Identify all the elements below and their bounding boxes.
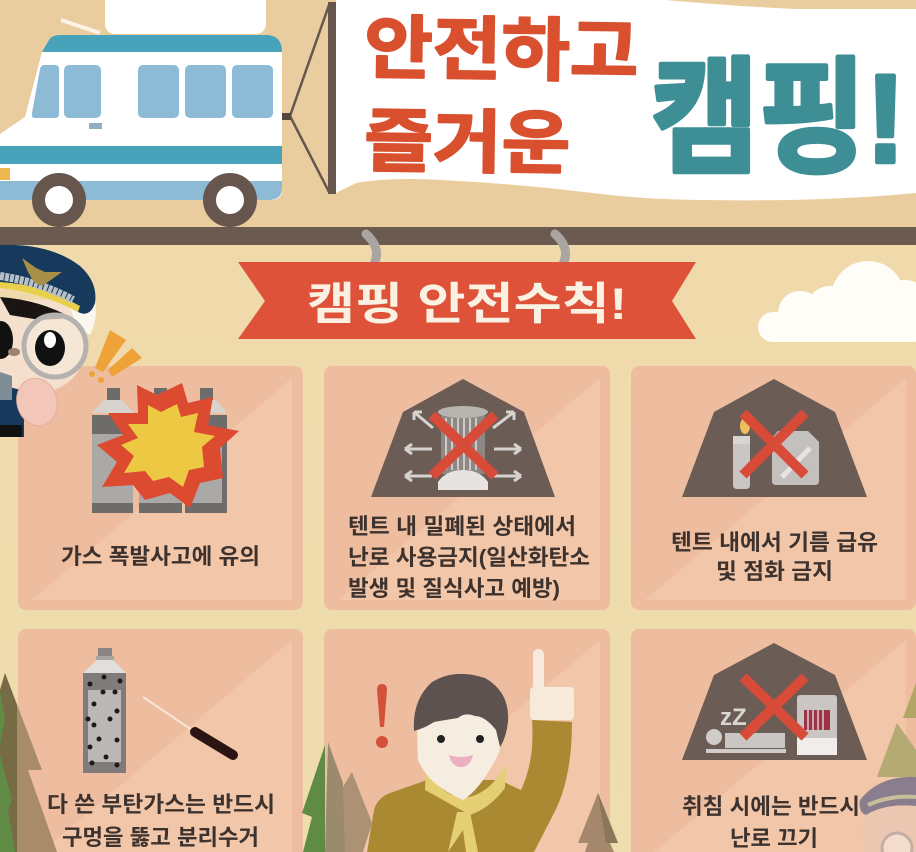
text: 난로 끄기 [730,826,818,851]
text: 구멍을 뚫고 분리수거 [62,825,259,850]
trees: left [0,673,57,852]
text: 다 쓴 부탄가스는 반드시 [47,792,275,817]
banner flag [282,0,916,200]
camping bus [0,0,282,220]
character: scout pointing up [367,649,574,852]
text [671,530,878,584]
icon: tent with sleeper and heater crossed out [682,643,867,760]
icon: punctured can and awl [83,648,233,773]
title: 안전하고 즐거운 [364,10,639,183]
text [682,794,860,851]
text: 가스 폭발사고에 유의 [61,544,260,569]
title: 캠핑!: 캠핑! [651,49,905,189]
icon: tent with lighter and fuel can crossed out [682,379,867,497]
police mascot [0,245,142,437]
panel: puncture butane can [18,629,303,852]
panel: no oil refuel in tent [631,366,916,610]
icon: tent with heater crossed out [371,379,555,497]
text [47,792,275,850]
text: 발생 및 질식사고 예방) [348,576,560,601]
text: 텐트 내에서 기름 급유 [671,530,878,555]
text [348,514,590,601]
text: 텐트 내 밀폐된 상태에서 [348,514,576,539]
title: 안전하고 즐거운: 안전하고 [364,10,639,91]
tree: centre-right [578,793,618,852]
ribbon heading: 캠핑 안전수칙! [307,280,627,329]
icon: tent with sleeper and heater crossed out: zZ [720,704,747,731]
panel: gas explosion [18,366,303,610]
text: 난로 사용금지(일산화탄소 [348,545,590,570]
text: 및 점화 금지 [716,559,833,584]
trees: centre-left [302,742,372,852]
panel: scout character [324,629,610,852]
panel: turn off heater when sleeping [631,629,916,852]
text: 취침 시에는 반드시 [682,794,860,819]
road [0,227,916,245]
panel: no heater in sealed tent [324,366,610,610]
ring hooks [366,234,566,273]
icon: gas cans and explosion [92,383,239,513]
cloud [758,261,916,342]
ribbon heading [238,262,696,339]
title: 안전하고 즐거운: 즐거운 [364,103,571,183]
trees: right and faded mascot [860,683,916,852]
icon: red exclamation mark [376,684,388,748]
